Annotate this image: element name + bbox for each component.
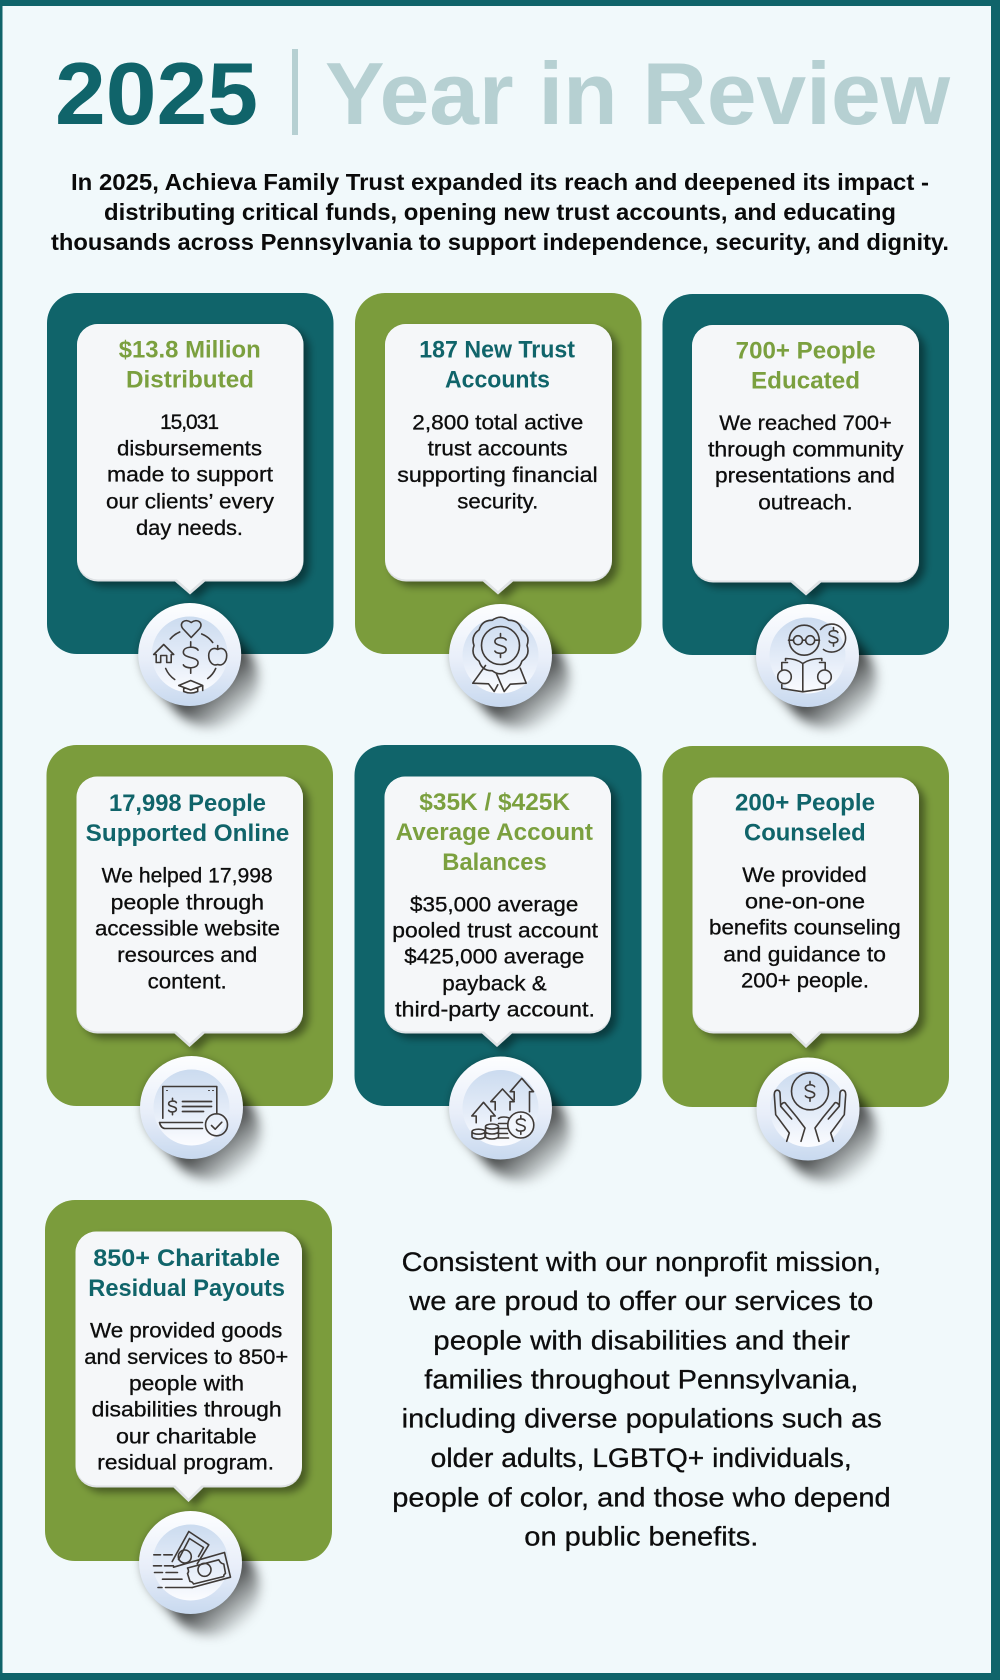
panel: 850+ Charitable Residual Payouts bbox=[45, 1200, 332, 1614]
card heading: $35K / $425K bbox=[419, 789, 571, 816]
card body text bbox=[95, 865, 280, 993]
card body text: We helped 17,998 bbox=[102, 865, 273, 888]
callout card bbox=[77, 324, 304, 594]
card body text bbox=[392, 893, 598, 1022]
title bbox=[55, 44, 951, 143]
closing mission text: including diverse populations such as bbox=[402, 1404, 882, 1434]
card body text: and guidance to bbox=[723, 943, 886, 966]
card body text bbox=[397, 411, 598, 513]
card body text bbox=[84, 1320, 288, 1474]
card body text: 15,031 bbox=[160, 411, 219, 434]
icon: circle with home, heart, apple, graduation cap and dollar bbox=[138, 603, 241, 706]
card heading: Accounts bbox=[445, 366, 550, 393]
callout card bbox=[384, 776, 611, 1047]
card body text: We provided goods bbox=[90, 1320, 282, 1343]
card heading: 700+ People bbox=[736, 337, 876, 364]
card body text: our clients’ every bbox=[106, 490, 275, 513]
icon: award ribbon with dollar bbox=[449, 604, 552, 707]
card body text: outreach. bbox=[758, 491, 853, 514]
intro text: In 2025, Achieva Family Trust expanded its reach and deepened its impact - bbox=[71, 169, 929, 195]
card heading bbox=[86, 790, 289, 847]
closing mission text: Consistent with our nonprofit mission, bbox=[402, 1247, 881, 1277]
card body text: and services to 850+ bbox=[84, 1346, 288, 1369]
icon: rising arrows with coins bbox=[449, 1056, 552, 1160]
icon: laptop with payment check bbox=[140, 1056, 243, 1159]
card body text: We provided bbox=[742, 864, 867, 887]
card heading: 200+ People bbox=[735, 789, 875, 816]
card body text: payback & bbox=[442, 972, 547, 995]
icon: flying bank notes bbox=[139, 1511, 242, 1614]
card heading: Supported Online bbox=[86, 820, 289, 847]
card body text: people through bbox=[111, 891, 264, 914]
card body text: 2,800 total active bbox=[412, 411, 583, 434]
card body text: day needs. bbox=[136, 517, 243, 540]
card heading: 850+ Charitable bbox=[93, 1245, 280, 1272]
card heading bbox=[735, 789, 875, 846]
card heading bbox=[396, 789, 593, 876]
card heading: Educated bbox=[751, 367, 860, 394]
card body text: through community bbox=[708, 438, 904, 461]
card body text: residual program. bbox=[97, 1451, 274, 1474]
card body text: accessible website bbox=[95, 917, 280, 940]
card body text: one-on-one bbox=[745, 891, 865, 914]
card body text: supporting financial bbox=[397, 464, 598, 487]
card body text: disbursements bbox=[117, 437, 262, 460]
closing mission text: people with disabilities and their bbox=[433, 1325, 850, 1355]
card heading: $13.8 Million bbox=[119, 336, 261, 363]
callout card bbox=[692, 778, 919, 1048]
card body text: our charitable bbox=[116, 1425, 257, 1448]
card body text: resources and bbox=[117, 944, 257, 967]
card body text bbox=[106, 411, 275, 540]
card body text: security. bbox=[457, 490, 538, 513]
card body text: disabilities through bbox=[92, 1399, 282, 1422]
title: 2025 bbox=[55, 44, 258, 143]
closing mission text: older adults, LGBTQ+ individuals, bbox=[431, 1443, 852, 1473]
closing mission text: families throughout Pennsylvania, bbox=[424, 1364, 858, 1394]
card body text: third-party account. bbox=[395, 999, 595, 1022]
card body text: $35,000 average bbox=[410, 893, 578, 916]
title: Year in Review bbox=[325, 44, 951, 143]
card body text bbox=[709, 864, 901, 993]
icon: hands holding a dollar coin bbox=[756, 1058, 860, 1160]
card body text bbox=[708, 412, 904, 514]
icon: person with glasses reading a book with dollar bbox=[756, 604, 859, 707]
callout card bbox=[692, 325, 919, 596]
panel: 17,998 People Supported Online bbox=[46, 745, 333, 1159]
card body text: $425,000 average bbox=[404, 946, 584, 969]
card body text: made to support bbox=[107, 464, 273, 487]
card heading: 17,998 People bbox=[109, 790, 266, 817]
panel: $35K / $425K Average Account Balances bbox=[354, 745, 642, 1160]
closing mission text: we are proud to offer our services to bbox=[408, 1286, 873, 1316]
panel: 200+ People Counseled bbox=[662, 746, 949, 1160]
closing mission text bbox=[392, 1247, 891, 1552]
card body text: pooled trust account bbox=[392, 920, 598, 943]
closing mission text: people of color, and those who depend bbox=[392, 1482, 891, 1512]
card heading: Average Account bbox=[396, 819, 593, 846]
panel: 187 New Trust Accounts bbox=[355, 293, 642, 707]
card body text: We reached 700+ bbox=[719, 412, 892, 435]
card body text: people with bbox=[129, 1373, 244, 1396]
callout card bbox=[76, 1232, 302, 1502]
card heading: Residual Payouts bbox=[88, 1275, 285, 1302]
callout card bbox=[385, 324, 612, 594]
card heading bbox=[419, 336, 575, 393]
card body text: content. bbox=[148, 970, 227, 993]
card body text: presentations and bbox=[715, 465, 895, 488]
card heading bbox=[736, 337, 876, 394]
card heading bbox=[88, 1245, 285, 1302]
card heading bbox=[119, 336, 261, 393]
card body text: benefits counseling bbox=[709, 917, 901, 940]
closing mission text: on public benefits. bbox=[524, 1522, 758, 1552]
intro text: thousands across Pennsylvania to support independence, security, and dignity. bbox=[51, 229, 949, 255]
intro text: distributing critical funds, opening new trust accounts, and educating bbox=[104, 199, 896, 225]
card heading: Balances bbox=[442, 849, 547, 876]
card heading: Distributed bbox=[126, 366, 254, 393]
intro text bbox=[51, 169, 949, 255]
callout card bbox=[76, 776, 303, 1047]
panel: 700+ People Educated bbox=[662, 294, 949, 707]
card heading: Counseled bbox=[744, 819, 866, 846]
card body text: 200+ people. bbox=[741, 970, 869, 993]
panel: $13.8 Million Distributed bbox=[47, 293, 334, 706]
card body text: trust accounts bbox=[428, 438, 568, 461]
card heading: 187 New Trust bbox=[419, 336, 575, 363]
